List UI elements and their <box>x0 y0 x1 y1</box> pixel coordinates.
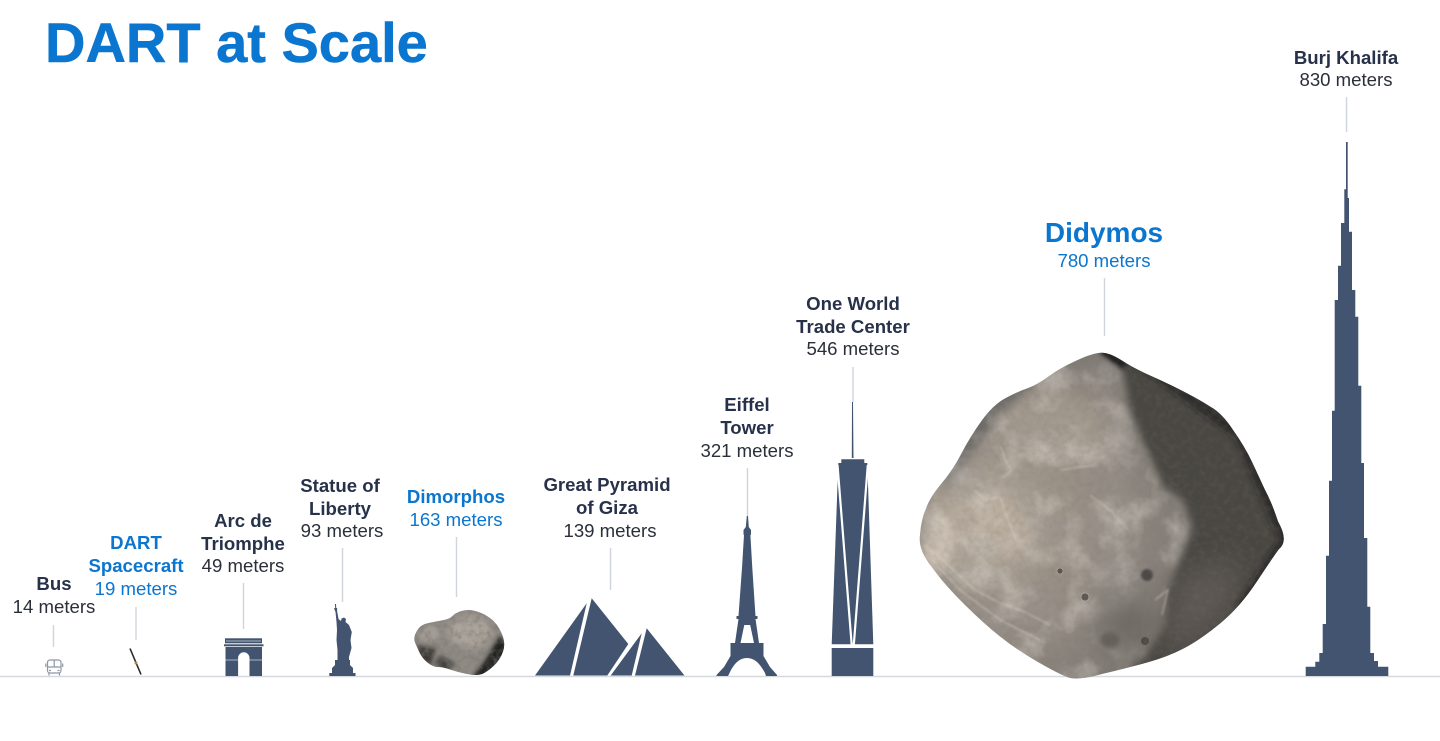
label: pyramid: Great Pyramid <box>543 474 671 495</box>
label: One World Trade Center: 546 meters <box>806 338 900 359</box>
item: One World Trade Center <box>796 293 910 676</box>
label: Eiffel: Tower <box>720 417 774 438</box>
label: arc: Arc de <box>214 510 272 531</box>
label: statue: Liberty <box>309 498 372 519</box>
label: DART spacecraft <box>88 532 184 599</box>
item: DART spacecraft <box>88 532 184 674</box>
icon: statue <box>329 604 356 676</box>
icon: spacecraft <box>130 648 141 674</box>
label: Didymos: 780 meters <box>1057 250 1151 271</box>
leader line: arc <box>242 583 244 629</box>
leader line: Burj <box>1346 97 1348 132</box>
label: pyramid: 139 meters <box>563 520 657 541</box>
label: Eiffel: Eiffel <box>724 394 770 415</box>
item: Great Pyramid of Giza <box>535 474 684 676</box>
label: Dimorphos <box>407 486 505 530</box>
icon: One World Trade Center <box>832 402 873 676</box>
label: Didymos <box>1045 217 1163 271</box>
leader line: statue <box>342 548 344 602</box>
label: DART spacecraft: DART <box>110 532 162 553</box>
label: One World Trade Center: One World <box>806 293 900 314</box>
label: Dimorphos: 163 meters <box>409 509 503 530</box>
icon: bus <box>46 660 63 676</box>
item: Statue of Liberty <box>300 475 383 676</box>
label: Burj Khalifa: 830 meters <box>1299 69 1393 90</box>
icon: arc <box>224 638 264 676</box>
item: bus <box>13 573 95 676</box>
label: bus <box>13 573 95 617</box>
label: pyramid: of Giza <box>576 497 639 518</box>
label: arc: 49 meters <box>202 555 284 576</box>
leader line: pyramid <box>610 548 612 590</box>
icon: Burj Khalifa <box>1306 142 1388 676</box>
label: statue: Statue of <box>300 475 381 496</box>
icon: Eiffel Tower <box>716 516 777 676</box>
label: bus: Bus <box>36 573 72 594</box>
label: Didymos: Didymos <box>1045 217 1163 248</box>
image: Dimorphos asteroid <box>414 610 504 675</box>
item: Eiffel Tower <box>700 394 794 676</box>
label: Eiffel <box>700 394 794 461</box>
label: pyramid <box>543 474 671 541</box>
label: Burj Khalifa: Burj Khalifa <box>1294 47 1399 68</box>
item: Didymos <box>915 217 1300 690</box>
leader line: spacecraft <box>135 607 137 640</box>
baseline <box>0 676 1440 678</box>
label: arc: Triomphe <box>201 533 285 554</box>
leader line: Eiffel <box>746 468 748 516</box>
leader line: bus <box>52 625 54 647</box>
label: One World Trade Center <box>796 293 910 359</box>
label: arc <box>201 510 285 576</box>
label: One World Trade Center: Trade Center <box>796 316 910 337</box>
leader line: Dimorphos <box>456 537 458 597</box>
icon: pyramids <box>535 598 684 676</box>
leader line: One World <box>852 367 854 402</box>
label: bus: 14 meters <box>13 596 95 617</box>
leader line: Didymos <box>1104 278 1106 336</box>
item: Burj Khalifa <box>1294 47 1399 676</box>
item: Dimorphos <box>408 490 504 675</box>
label: DART spacecraft: Spacecraft <box>88 555 184 576</box>
title: DART at Scale <box>45 11 428 74</box>
label: statue: 93 meters <box>301 520 383 541</box>
label: Dimorphos: Dimorphos <box>407 486 505 507</box>
item: Arc de Triomphe <box>201 510 285 676</box>
image: Didymos asteroid <box>920 352 1284 678</box>
label: DART spacecraft: 19 meters <box>95 578 177 599</box>
label: Eiffel: 321 meters <box>700 440 794 461</box>
label: statue <box>300 475 383 541</box>
label: Burj Khalifa <box>1294 47 1399 90</box>
